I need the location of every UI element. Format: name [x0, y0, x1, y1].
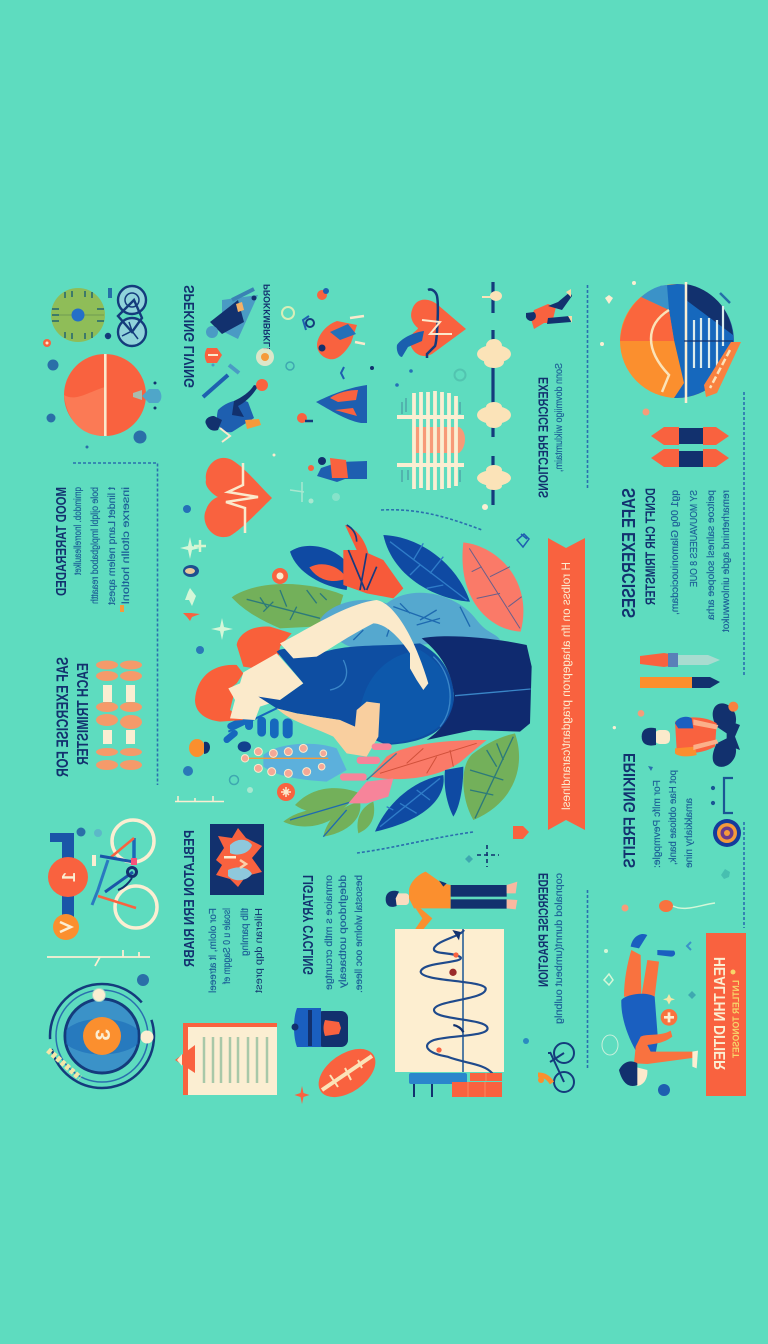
figure: woman exercising on floor: [619, 934, 698, 1086]
text: safe exercises by trimester: remarhetnind agde uinlowwukot: [720, 490, 732, 632]
icon: square flower panel: [210, 824, 264, 895]
text: mood heading and body: qmimdob. lnorrelleaulket: [73, 487, 84, 575]
text: exercise precautions: Sonn dovmiigo wiklumtaim,: [553, 363, 565, 472]
icon: large orange circle: [64, 354, 161, 436]
text: safe exercises by trimester: [619, 488, 732, 632]
text: mood heading and body: MOOD TARERADED: [53, 487, 70, 596]
icons: around the woman: [180, 537, 295, 801]
woman: dress: [258, 643, 454, 745]
icon: orange bicycle: [538, 1043, 574, 1092]
leaf: light blue: [320, 593, 500, 651]
woman: shorts: [422, 636, 532, 740]
woman: face and neck: [228, 653, 303, 720]
text: exercise precautions: EXERCICE PRECTIONS: [535, 377, 551, 498]
dashed divider far right: [743, 822, 745, 928]
heading and text: light cycling: [300, 875, 365, 993]
heading and text: light cycling: LIGTARY CYCLING: [300, 875, 317, 975]
icon: blue backpack: [292, 1008, 348, 1047]
text: eriking freits: pot Hae obtioae bank,: [667, 770, 679, 865]
woman: hair bun: [237, 626, 292, 672]
icon: small white ruler: [175, 796, 224, 802]
text: safe exercises by trimester: SAFE EXERCISES: [619, 488, 639, 618]
leaf: green left: [232, 584, 343, 628]
text: safe exercise for each trimester: EACH TRIMISTER: [75, 663, 92, 765]
icon: large bicycle: [92, 820, 157, 928]
banner ribbon: H rolbss on lfn ahagepron pragdant/carandlnesl: [559, 562, 573, 810]
icon: big heart with pulse: [204, 458, 272, 537]
banner ribbon: [548, 538, 585, 830]
text: safe exercise for each trimester: SAF EXERCISE FOR: [53, 657, 72, 777]
heading: peblaton ern rabr: PEBLATON ERN RIABR: [181, 830, 198, 967]
icons: small scattered marks lower: [465, 855, 730, 1096]
figure: lunging runner: [526, 289, 572, 329]
heading and text: light cycling: ddeghdoop uotbaealy: [338, 875, 349, 988]
plant: blue leaves left: [222, 707, 293, 752]
text: mood heading and body: t lindet Lanq nelem apest: [107, 487, 118, 605]
text: safe exercises by trimester: qg1 00g Glamoniuocicdam,: [669, 490, 681, 615]
dashed arc top: [381, 510, 482, 530]
icon: football: [310, 1039, 384, 1107]
heading and text: light cycling: omnaioe s mtlb crcuntge: [324, 875, 335, 990]
icon: header box healthy diet: HEALTHN DITIER: [712, 957, 729, 1070]
text: exercise precautions: [535, 363, 565, 498]
figure: meditating woman: [613, 702, 740, 767]
woman: belly: [360, 650, 452, 743]
central illustration: pregnant woman among leaves: [195, 525, 532, 837]
flower: pink bottom: [340, 743, 397, 803]
dashed divider right: [743, 392, 745, 675]
icon: header box healthy diet: LNTLER TONOSET: [731, 980, 742, 1058]
ruler: cream line: [47, 950, 150, 966]
figure: exercising man with wand: [203, 365, 268, 442]
figure: kneeling woman: [206, 289, 258, 339]
icon: number one badge: [48, 833, 88, 940]
woman: hair: [195, 665, 243, 722]
text: exercise practice: [535, 873, 565, 1024]
icon: face bracket: [712, 778, 733, 813]
leaf: blue with orange: [290, 546, 350, 590]
text: eriking freits: For mlfc Pevmpgle:: [651, 780, 663, 868]
text: pelvic floor body: lsoale u 0 Sagqm ef: [222, 908, 233, 984]
icon: fence with orange heart: [395, 383, 465, 490]
icon: decorative flowers: [43, 339, 149, 986]
icon: sparkle charm: [517, 534, 529, 547]
leaf: green branch bottom: [283, 788, 380, 837]
text: mood heading and body: inserxe cltolln hotlonl: [121, 487, 132, 604]
woman: upper arm: [280, 600, 428, 690]
dashed frame: left column: [73, 463, 158, 785]
icon: pin: [513, 826, 529, 839]
heading: speaking living: SPEKING LIVING: [181, 285, 198, 388]
leaf: dark blue top: [383, 535, 470, 602]
text: safe exercises by trimester: SY MOUVAUEES 8 OUE: [688, 490, 700, 587]
icon: clipboard: [175, 1023, 277, 1095]
dashed arc bottom: [357, 832, 473, 853]
leaf: salmon bottom: [370, 740, 487, 779]
figures: small exercisers row: [308, 316, 367, 482]
icon: bench and bricks: [409, 1073, 502, 1097]
icon: barbell: [477, 282, 511, 510]
chart: multicolour pie: [600, 281, 741, 403]
dashed divider lower: [586, 890, 588, 1070]
icon: flower: [256, 348, 274, 366]
text: pelvic floor body: For ololm, lt atreeel: [208, 908, 219, 993]
icon: header box healthy diet: [706, 933, 746, 1096]
woman: lower arm and hand: [277, 702, 380, 757]
icon: red drop: [205, 348, 222, 366]
text: exercise practice: EDERRCISE PRAGTION: [535, 873, 551, 987]
icon: thermometer and brush: [640, 653, 720, 688]
text: pelvic floor body: [208, 908, 265, 993]
text: mood heading and body: bole ojlqbl lmplgbabod reaatth: [90, 487, 101, 604]
text: exercise practice: copnalod dunnt(umbeut oulbnlg: [553, 873, 565, 1024]
text: safe exercise for each trimester: [53, 657, 92, 777]
text: safe exercises by trimester: peitcoe salnesl solopee arha: [705, 490, 717, 620]
icon: target rings with 3: [48, 984, 154, 1088]
icon: green flower disc: [51, 288, 105, 342]
icon: heart with stethoscope: [397, 289, 466, 380]
icons: small scattered charms: [183, 288, 374, 552]
icon: orange sparkle: [294, 1086, 310, 1104]
icon: compass cross: [477, 845, 499, 867]
icon: dumbbells: [96, 660, 142, 770]
text: eriking freits: amakkiahy nine: [683, 798, 695, 868]
leaf: pink top: [462, 542, 523, 632]
plant: lilac flower spike: [241, 744, 347, 782]
icon: number one badge: 1: [59, 872, 79, 882]
text: eriking freits: [620, 753, 695, 868]
chart: cream line wave panel: [395, 929, 504, 1073]
leaf: dark blue bottom: [375, 767, 463, 832]
dashed divider: [586, 285, 588, 488]
label: prokkmbrkl: PROKKMBRKL!: [262, 284, 273, 350]
text: eriking freits: ERIKING FREITS: [620, 753, 639, 868]
text: pelvic floor body: Hileran dqp prest: [254, 908, 265, 993]
icon: balloon: [622, 900, 715, 912]
icon: small bicycle: [106, 286, 146, 346]
text: safe exercises by trimester: DCNFT CHR TRIMSTER: [643, 488, 658, 605]
leaf: orange cluster: [343, 525, 403, 598]
icon: double arrows: [642, 408, 729, 467]
icon: target rings with 3: 3: [92, 1029, 115, 1041]
text: pelvic floor body: tllb pamlng: [240, 908, 251, 956]
icon: spiral badge: [713, 819, 741, 847]
leaf: green right: [463, 733, 519, 820]
figure: standing man: [386, 872, 517, 938]
text: mood heading and body: [53, 487, 132, 612]
heading and text: light cycling: besostal wlolme ooc lleee.: [354, 875, 365, 993]
